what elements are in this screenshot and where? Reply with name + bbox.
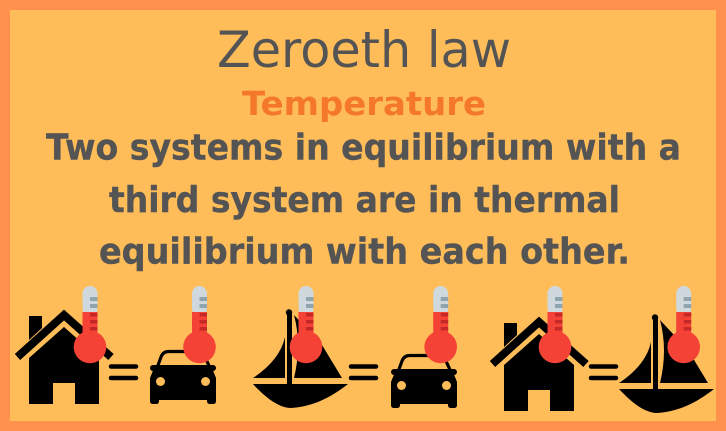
- subtitle: temperature: Temperature: [242, 84, 486, 123]
- icon: thermometer on house: [74, 286, 106, 363]
- equation: house equals boat: [492, 286, 714, 413]
- statement text: equilibrium with each other.: [99, 232, 630, 272]
- icon: thermometer on house: [539, 286, 571, 363]
- icon: thermometer on car: [424, 286, 457, 363]
- icon: thermometer on boat: [667, 286, 700, 363]
- title: Zeroeth law: [217, 21, 511, 79]
- icon: house: [18, 315, 111, 404]
- statement text: Two systems in equilibrium with a: [46, 128, 681, 168]
- equation: house equals car: [18, 286, 216, 404]
- icon: thermometer on car: [183, 286, 216, 363]
- icon: car: [150, 352, 216, 404]
- equation: boat equals car: [253, 286, 457, 408]
- equals sign: [111, 366, 136, 378]
- equals sign: [591, 366, 616, 378]
- statement text: third system are in thermal: [109, 180, 620, 221]
- icon: boat: [619, 314, 714, 413]
- icon: car: [391, 356, 457, 408]
- icon: thermometer on boat: [290, 286, 322, 363]
- icon: house: [492, 322, 586, 411]
- icon: boat: [253, 309, 348, 408]
- equals sign: [351, 366, 376, 378]
- statement text: [46, 128, 681, 272]
